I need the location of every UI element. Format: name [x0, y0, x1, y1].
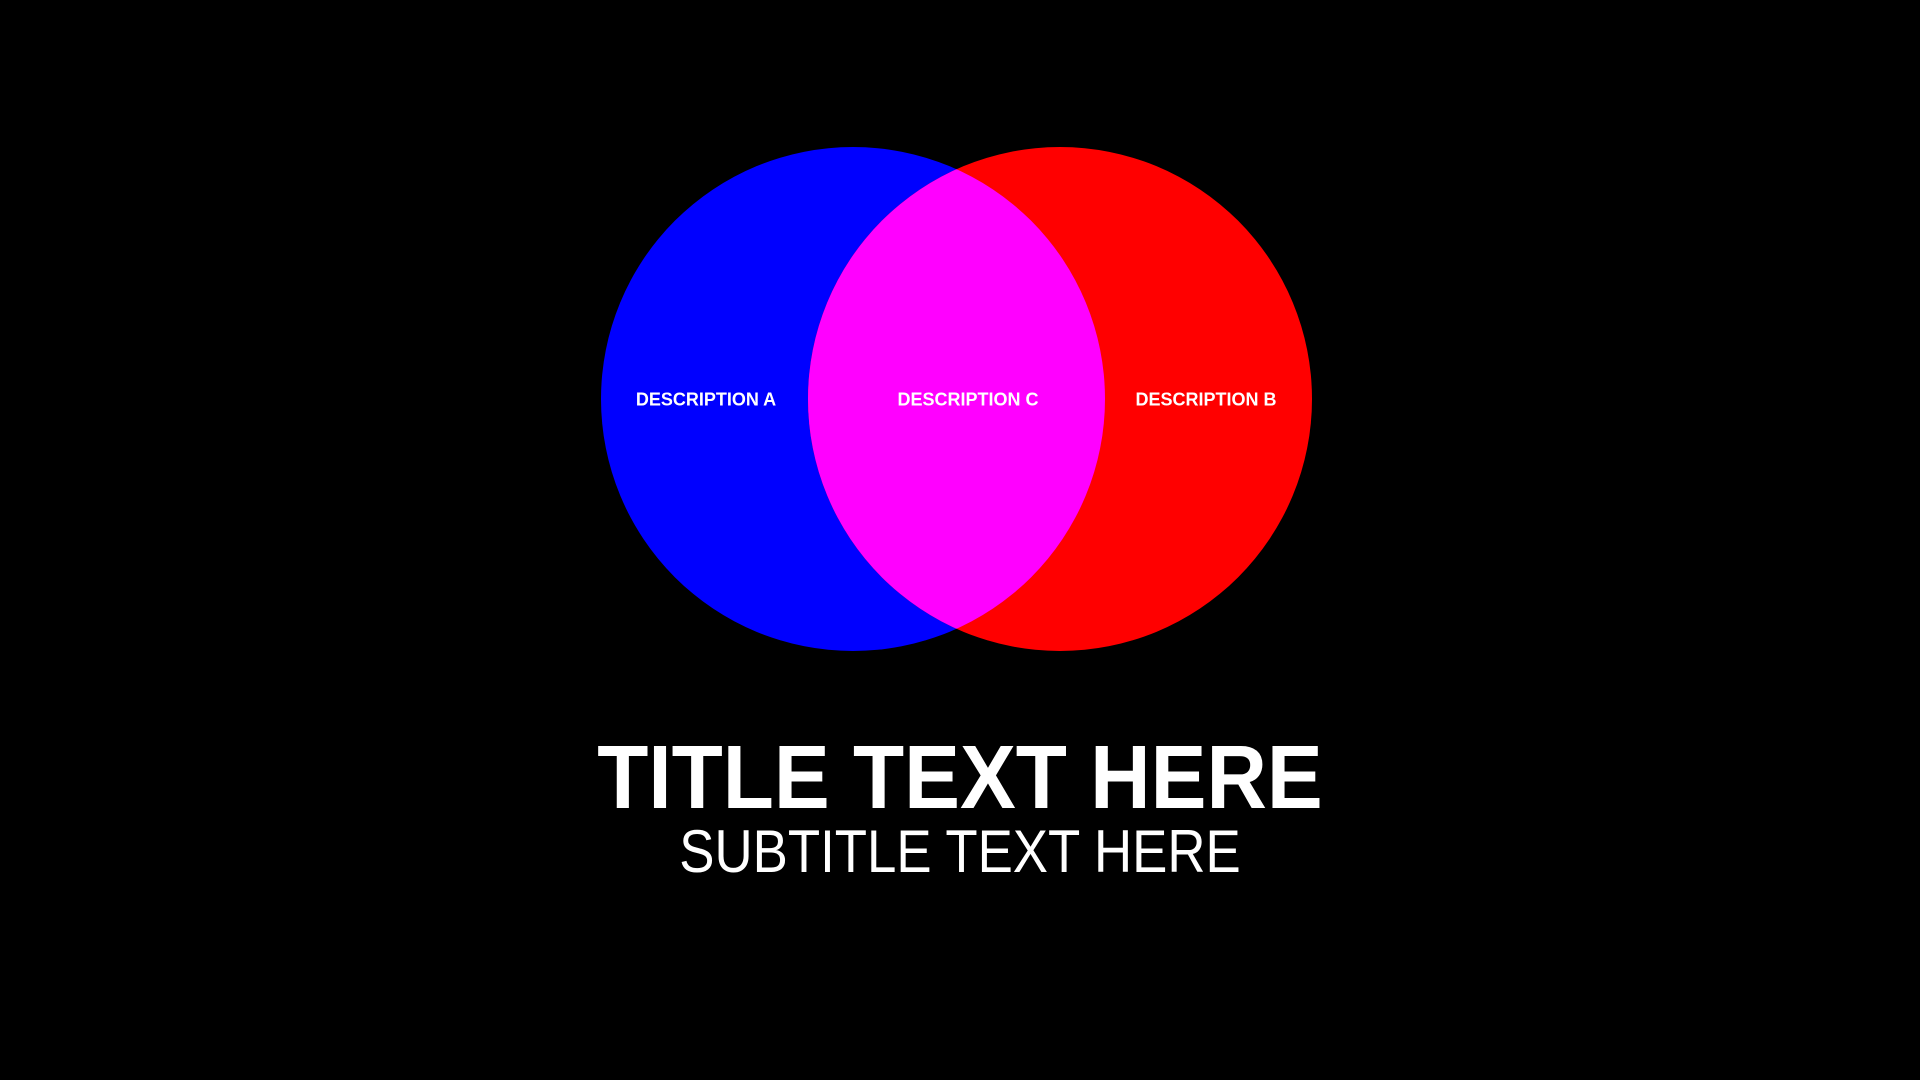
label: description B: DESCRIPTION B: [1135, 390, 1277, 410]
circle: B (red): [808, 147, 1312, 651]
title: TITLE TEXT HERE: [597, 728, 1323, 828]
overlap: C (magenta): [808, 169, 1105, 629]
circle: A (blue): [601, 147, 1105, 651]
label: description A: DESCRIPTION A: [636, 390, 776, 410]
subtitle: SUBTITLE TEXT HERE: [679, 818, 1241, 885]
label: description C: DESCRIPTION C: [897, 390, 1039, 410]
venn diagram: [601, 147, 1312, 651]
